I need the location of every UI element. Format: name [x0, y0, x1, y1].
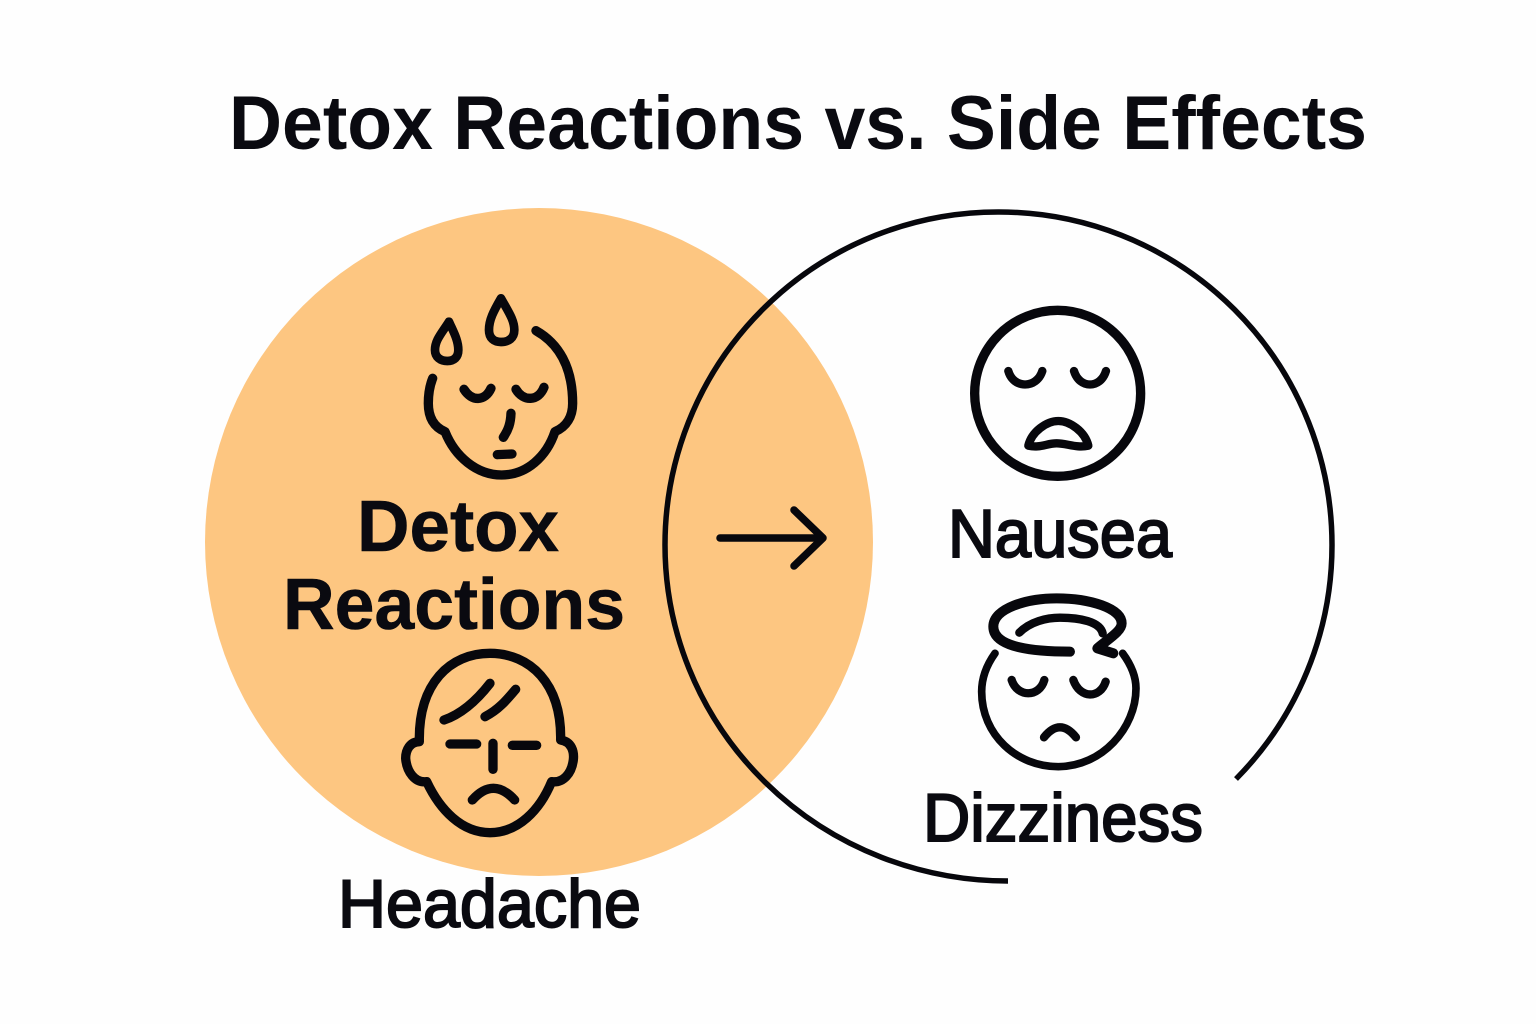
label: dizziness: Dizziness — [923, 780, 1203, 856]
icon: headache face — [406, 653, 574, 833]
heading: detox reactions: Detox — [357, 487, 559, 567]
panel: detox reactions circle — [205, 208, 873, 876]
label: headache: Headache — [338, 866, 641, 942]
arrow — [720, 510, 823, 566]
icon: nausea face — [975, 310, 1141, 476]
label: nausea: Nausea — [948, 496, 1172, 572]
title: Detox Reactions vs. Side Effects — [229, 81, 1367, 166]
icon: dizzy face — [982, 598, 1136, 767]
panel: side effects circle outline — [665, 212, 1332, 881]
icon: sweating face — [428, 298, 573, 475]
heading: detox reactions: Reactions — [283, 565, 625, 645]
